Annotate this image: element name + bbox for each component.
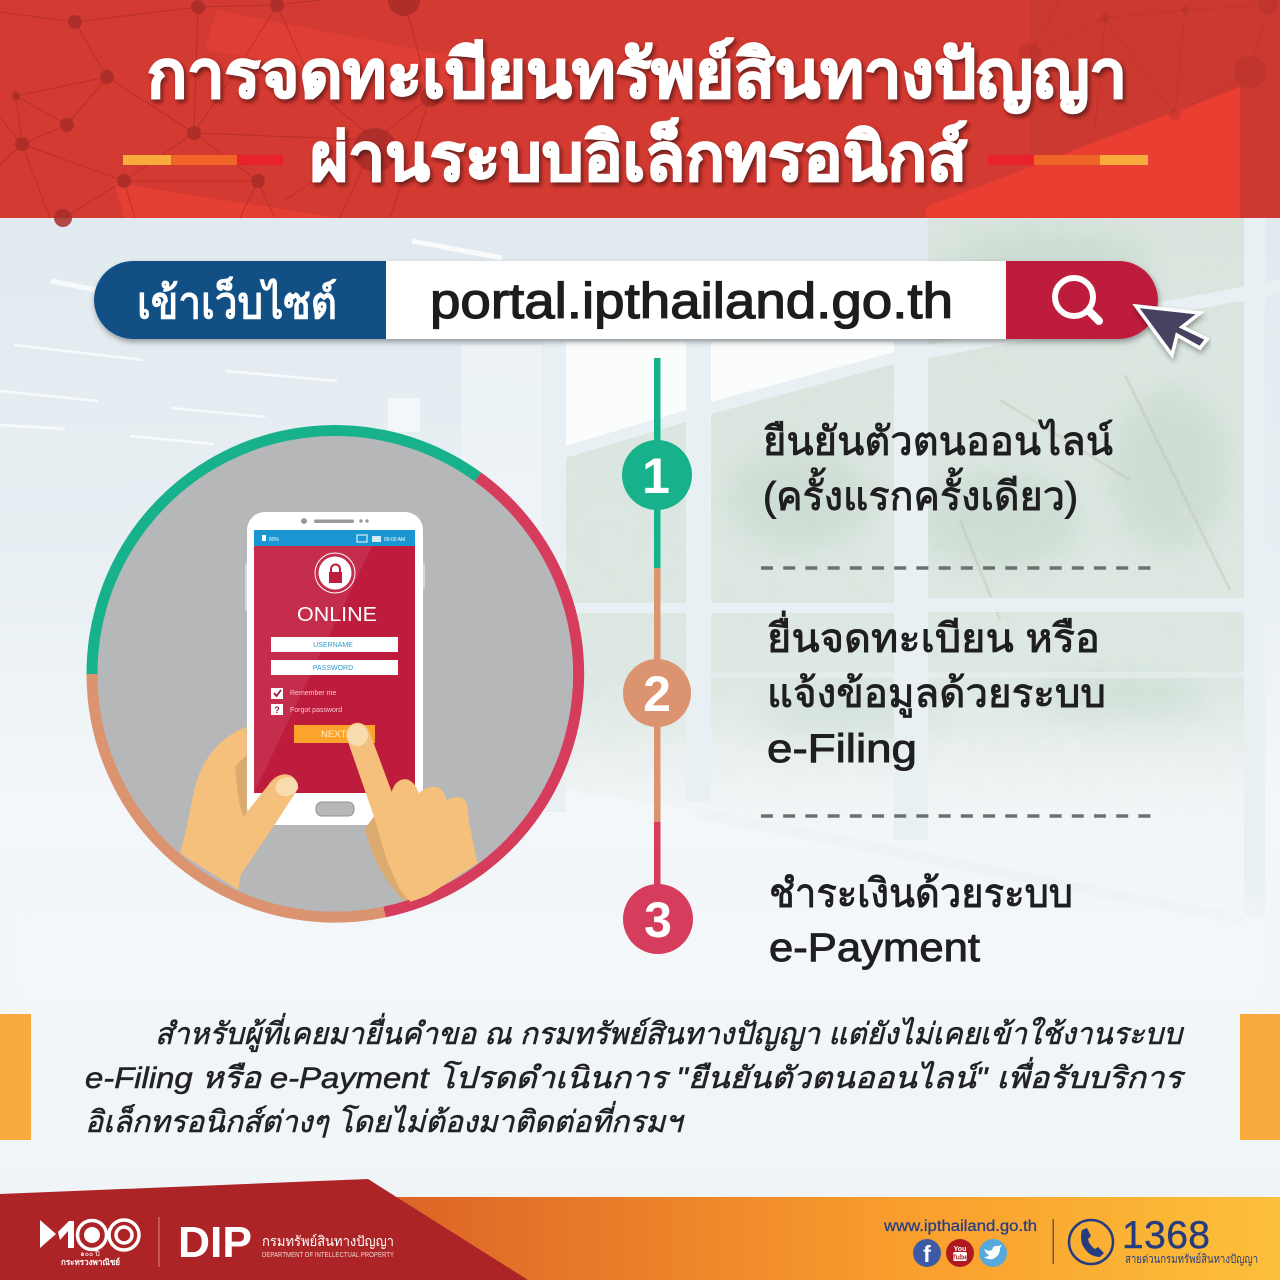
- phone screen: [254, 530, 415, 793]
- phone screen: USERNAME: [313, 642, 353, 649]
- title: ผ่านระบบอิเล็กทรอนิกส์: [310, 117, 968, 194]
- search bar: [94, 261, 1158, 339]
- step 2 text: ยื่นจดทะเบียน หรือ: [767, 611, 1100, 661]
- icon: twitter: [979, 1239, 1007, 1267]
- step 2 badge: 2: [643, 666, 671, 722]
- step 3 text: e-Payment: [769, 926, 980, 970]
- phone screen: Forgot password: [290, 707, 342, 714]
- footer band: [0, 1179, 1280, 1280]
- icon: padlock: [315, 553, 355, 593]
- title: การจดทะเบียนทรัพย์สินทางปัญญา: [147, 37, 1127, 113]
- phone screen: Remember me: [290, 690, 336, 697]
- illustration: phone login in circle: [92, 430, 579, 917]
- phone screen: ?: [274, 705, 280, 715]
- phone screen: PASSWORD: [313, 665, 353, 672]
- icon: facebook: [913, 1239, 941, 1267]
- footer divider: [1052, 1219, 1054, 1264]
- step 3 text: [769, 872, 1073, 970]
- icon: youtube: You: [954, 1246, 966, 1253]
- search label: เข้าเว็บไซต์: [137, 276, 337, 328]
- hotline number: [1122, 1214, 1258, 1266]
- logo: MOC 100 years: กระทรวงพาณิชย์: [61, 1257, 120, 1267]
- logo divider: [158, 1217, 160, 1267]
- logo: MOC 100 years: [40, 1220, 139, 1267]
- step 3 badge: [623, 884, 693, 954]
- logo: DIP: กรมทรัพย์สินทางปัญญา: [262, 1233, 394, 1249]
- icon: youtube: [946, 1239, 974, 1267]
- phone body: [245, 512, 425, 825]
- phone screen: NEXT: [321, 729, 347, 740]
- logo: DIP: DEPARTMENT OF INTELLECTUAL PROPERTY: [262, 1252, 394, 1259]
- icon: mouse cursor: [1136, 306, 1207, 355]
- phone screen: 09:00 AM: [384, 537, 405, 543]
- icon: facebook: f: [923, 1241, 931, 1267]
- step 2 badge: [623, 659, 691, 727]
- website address: portal.ipthailand.go.th: [430, 273, 953, 329]
- icon: telephone: [1069, 1220, 1113, 1264]
- phone screen: ONLINE: [297, 604, 377, 626]
- hotline number: 1368: [1122, 1214, 1210, 1257]
- website address footer: www.ipthailand.go.th: [883, 1218, 1037, 1235]
- step 3 badge: 3: [644, 892, 672, 948]
- step 1 badge: [622, 440, 692, 510]
- step 1 text: [763, 419, 1113, 519]
- logo: DIP: [178, 1218, 394, 1267]
- note paragraph: e-Filing หรือ e-Payment โปรดดำเนินการ "ยืนยันตัวตนออนไลน์" เพื่อรับบริการ: [85, 1057, 1186, 1095]
- step 1 text: (ครั้งแรกครั้งเดียว): [763, 467, 1078, 519]
- decorative title bar: left: [123, 155, 283, 165]
- icon: youtube: Tube: [952, 1254, 968, 1262]
- note paragraph: สำหรับผู้ที่เคยมายื่นคำขอ ณ กรมทรัพย์สินทางปัญญา แต่ยังไม่เคยเข้าใช้งานระบบ: [155, 1013, 1185, 1052]
- divider dashes: [761, 568, 1152, 816]
- icon: magnifier: [1055, 278, 1099, 321]
- logo: DIP: DIP: [178, 1218, 252, 1267]
- step 1 badge: 1: [642, 448, 670, 504]
- phone screen: 80%: [269, 537, 280, 543]
- step 2 text: [767, 611, 1106, 771]
- side accent: left: [0, 1014, 31, 1140]
- step 3 text: ชำระเงินด้วยระบบ: [769, 872, 1073, 916]
- note paragraph: อิเล็กทรอนิกส์ต่างๆ โดยไม่ต้องมาติดต่อที่กรมฯ: [85, 1101, 685, 1139]
- panel: red header: [0, 0, 1280, 227]
- side accent: right: [1240, 1014, 1280, 1140]
- note paragraph: [85, 1013, 1186, 1139]
- step 1 text: ยืนยันตัวตนออนไลน์: [763, 419, 1113, 464]
- timeline: [622, 358, 693, 954]
- step 2 text: e-Filing: [767, 727, 917, 771]
- title: [147, 37, 1127, 194]
- logo: MOC 100 years: ๑๐๐ ปี: [80, 1250, 100, 1258]
- hands: [180, 723, 477, 905]
- step 2 text: แจ้งข้อมูลด้วยระบบ: [767, 672, 1106, 717]
- decorative title bar: right: [988, 155, 1148, 165]
